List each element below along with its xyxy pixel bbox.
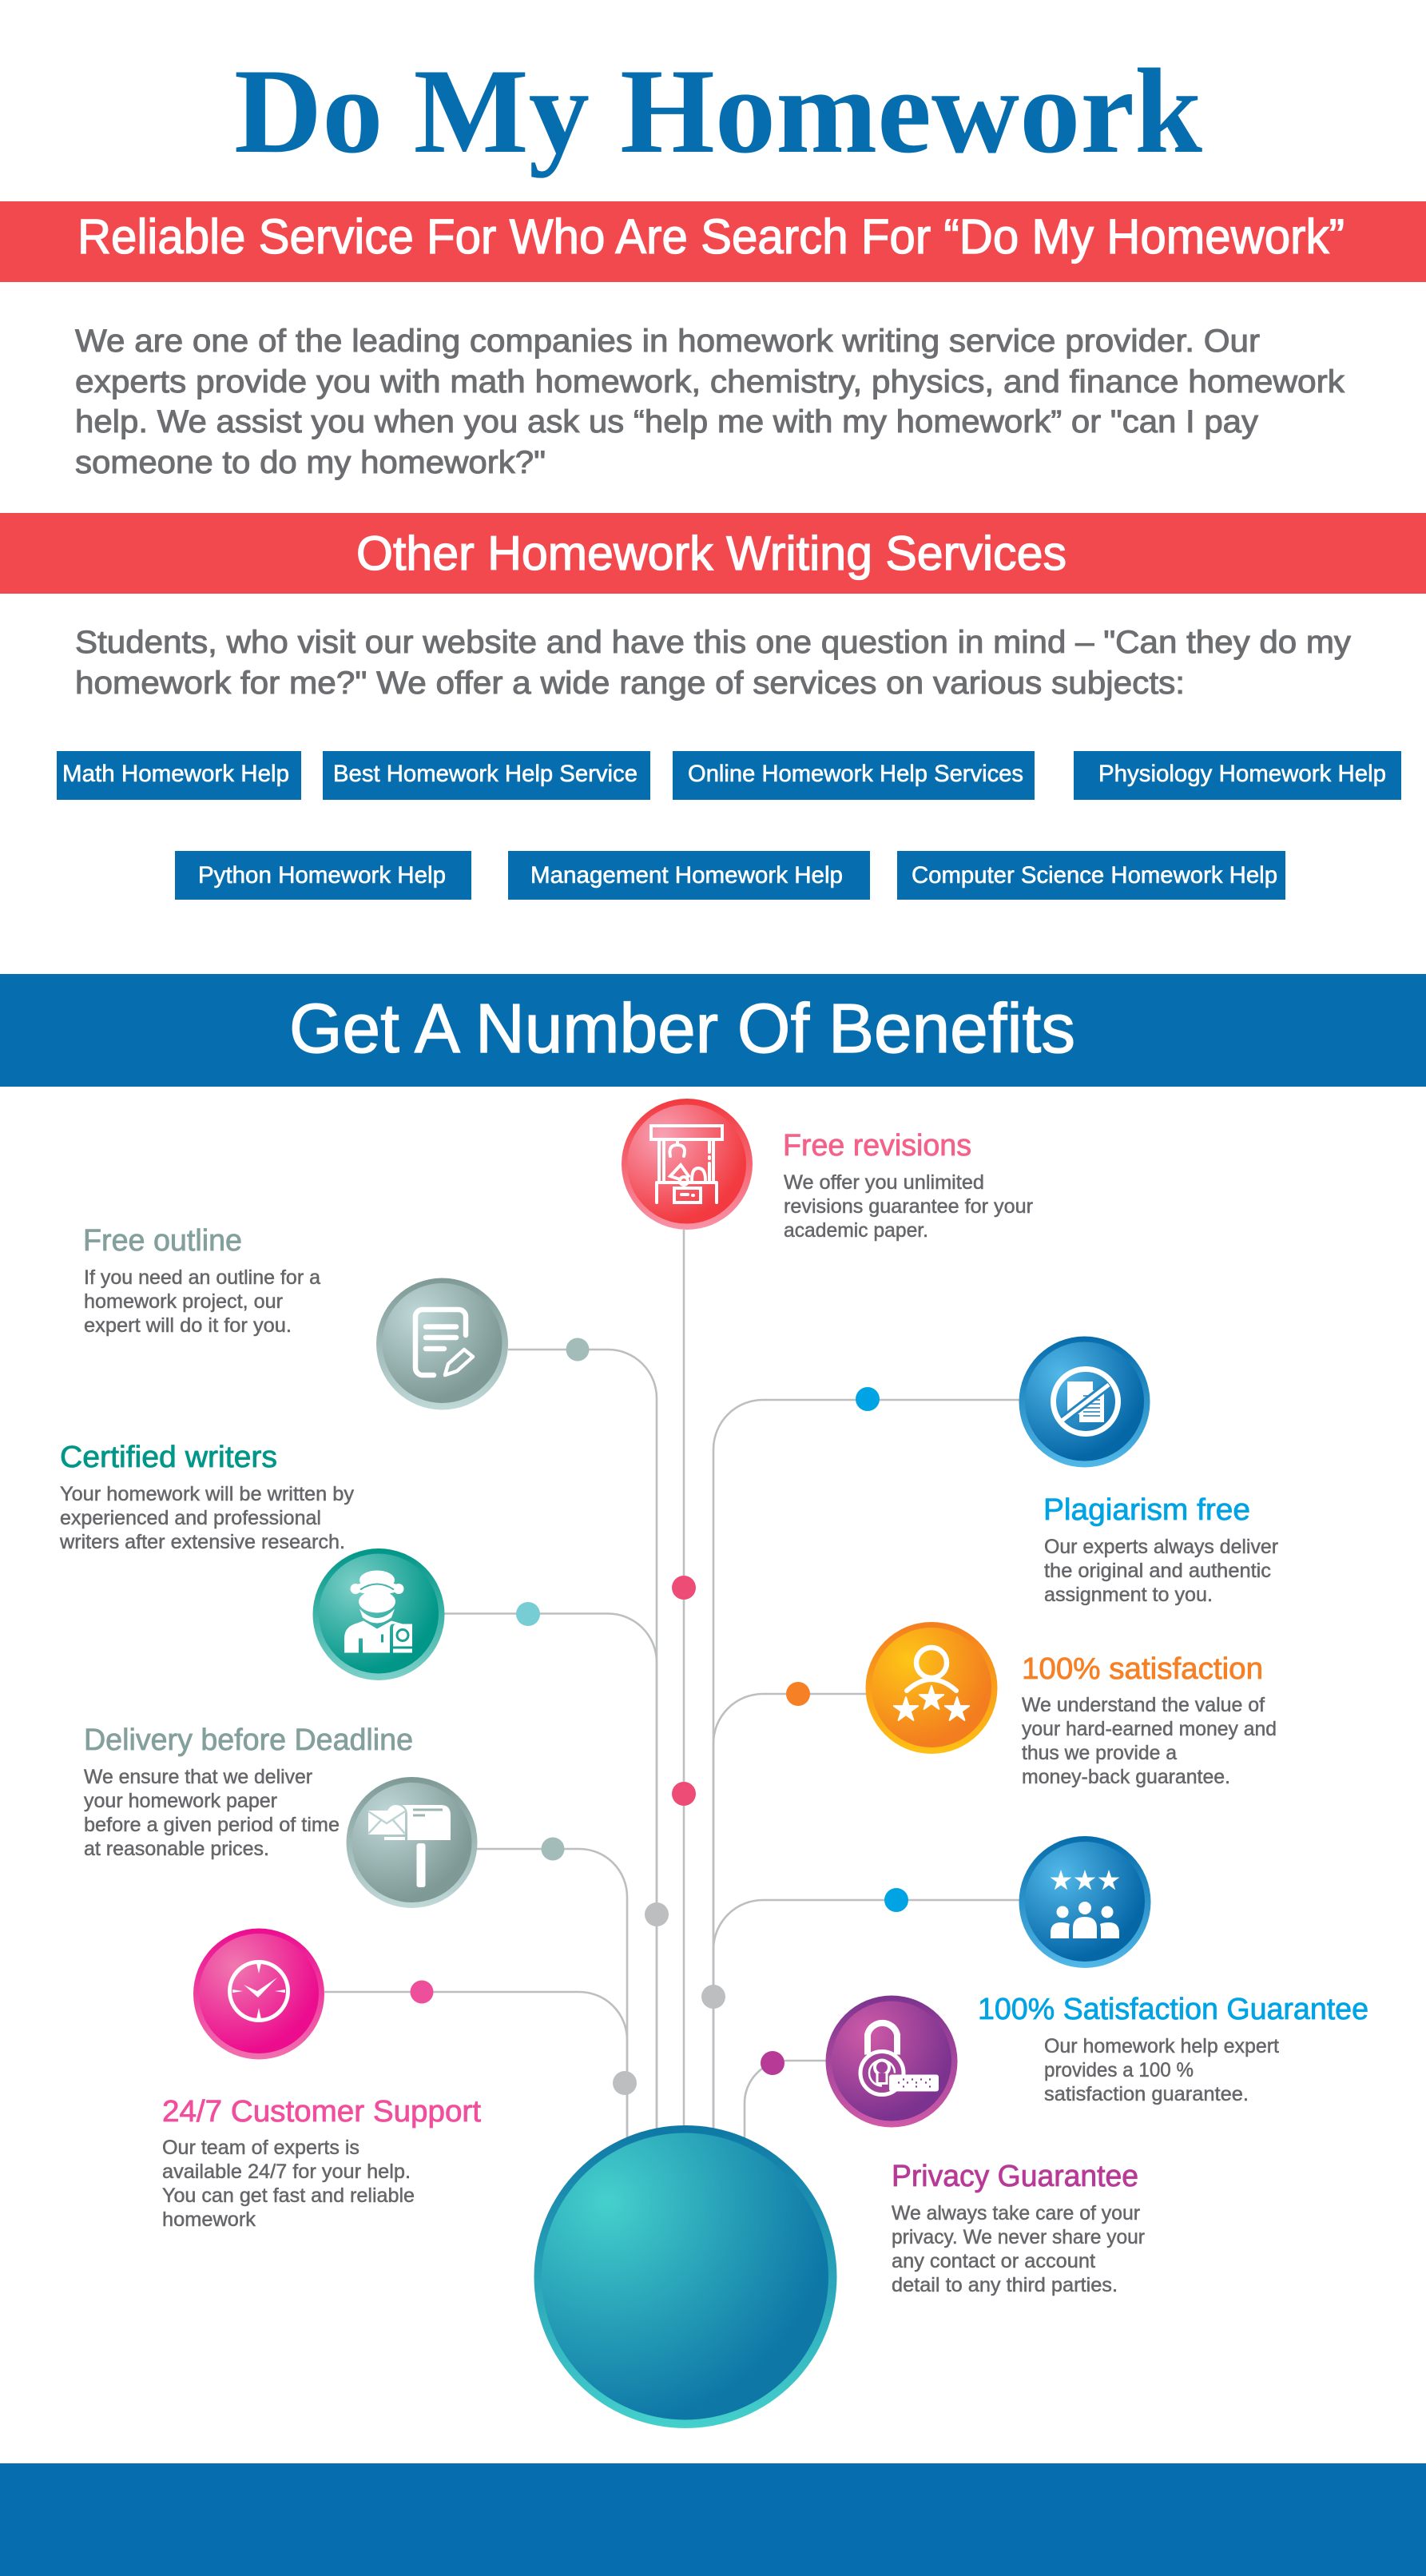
service buttons [57, 751, 1401, 900]
text: delivery before deadline: before a given period of time [84, 1814, 340, 1836]
text: 100% satisfaction: 100% satisfaction [1022, 1652, 1263, 1686]
button: math [57, 751, 301, 800]
text: delivery before deadline: We ensure that we deliver [84, 1766, 312, 1788]
banner: reliable service: Reliable Service For Who Are Search For “Do My Homework” [77, 209, 1345, 264]
bottom band [0, 2463, 1426, 2576]
text: privacy guarantee: privacy. We never share your [892, 2226, 1145, 2248]
text: 100% satisfaction [1022, 1652, 1277, 1788]
button: online: Online Homework Help Services [688, 761, 1023, 787]
text: plagiarism free: the original and authentic [1044, 1560, 1271, 1582]
text: certified writers [59, 1441, 355, 1553]
text: free revisions: academic paper. [784, 1219, 928, 1242]
intro paragraph: We are one of the leading companies in homework writing service provider. Our [75, 324, 1260, 359]
text: delivery before deadline: at reasonable prices. [84, 1838, 269, 1860]
banner: benefits: Get A Number Of Benefits [289, 990, 1075, 1067]
text: certified writers: experienced and professional [60, 1507, 321, 1529]
text: privacy guarantee: detail to any third parties. [892, 2274, 1118, 2296]
services paragraph [75, 625, 1351, 701]
button: math: Math Homework Help [62, 761, 289, 787]
intro paragraph [75, 324, 1345, 480]
text: 100% satisfaction guarantee: provides a 100 % [1044, 2059, 1194, 2081]
text: privacy guarantee [892, 2160, 1145, 2296]
intro paragraph: help. We assist you when you ask us “help me with my homework” or "can I pay [75, 404, 1258, 439]
text: certified writers: Your homework will be written by [60, 1483, 355, 1505]
text: delivery before deadline [84, 1723, 413, 1860]
button: best [323, 751, 650, 800]
button: physiology [1074, 751, 1401, 800]
text: 24/7 customer support: available 24/7 for your help. [162, 2161, 411, 2183]
text: free outline [83, 1224, 320, 1337]
text: 100% satisfaction guarantee: 100% Satisfaction Guarantee [978, 1993, 1368, 2026]
text: delivery before deadline: your homework paper [84, 1790, 277, 1812]
text: plagiarism free: Plagiarism free [1043, 1493, 1250, 1527]
banner: other services: Other Homework Writing Services [356, 527, 1067, 580]
text: free revisions [783, 1129, 1033, 1242]
text: delivery before deadline: Delivery before Deadline [84, 1723, 413, 1757]
text: 100% satisfaction: money-back guarantee. [1022, 1766, 1230, 1788]
text: 100% satisfaction guarantee: Our homework help expert [1044, 2035, 1279, 2057]
text: privacy guarantee: Privacy Guarantee [892, 2160, 1138, 2193]
button: best: Best Homework Help Service [333, 761, 638, 787]
text: free outline: Free outline [83, 1224, 242, 1258]
connector lines [324, 1230, 1019, 2141]
icon: blue rated team [1019, 1836, 1150, 1968]
text: plagiarism free: assignment to you. [1044, 1584, 1213, 1606]
text: free outline: expert will do it for you. [84, 1314, 292, 1337]
button: online [673, 751, 1035, 800]
intro paragraph: experts provide you with math homework, chemistry, physics, and finance homework [75, 364, 1345, 400]
button: python [175, 851, 471, 900]
text: 24/7 customer support: You can get fast and reliable [162, 2184, 415, 2207]
icon: delivery mailbox [347, 1777, 478, 1908]
icon: customer support clock [193, 1929, 324, 2060]
text: 100% satisfaction guarantee [978, 1993, 1368, 2105]
text: 100% satisfaction guarantee: satisfaction guarantee. [1044, 2083, 1249, 2105]
icon: plagiarism free [1019, 1336, 1150, 1467]
banner: other services [0, 513, 1426, 594]
text: free outline: homework project, our [84, 1290, 283, 1313]
text: free outline: If you need an outline for a [84, 1266, 320, 1289]
icon: free outline document and pencil [376, 1278, 508, 1409]
services paragraph: homework for me?" We offer a wide range of services on various subjects: [75, 666, 1185, 701]
text: privacy guarantee: We always take care of your [892, 2202, 1140, 2224]
banner: reliable service [0, 201, 1426, 282]
central hub circle [534, 2125, 837, 2428]
button: physiology: Physiology Homework Help [1098, 761, 1386, 787]
button: computer science [897, 851, 1285, 900]
text: certified writers: Certified writers [60, 1441, 277, 1474]
icon: privacy padlock [826, 1996, 957, 2127]
button: management [508, 851, 870, 900]
services paragraph: Students, who visit our website and have this one question in mind – "Can they do my [75, 625, 1351, 660]
icon: free revisions claw machine [622, 1099, 753, 1230]
button: management: Management Homework Help [530, 862, 843, 888]
icon: satisfaction person and stars [866, 1622, 997, 1754]
text: 100% satisfaction: We understand the value of [1022, 1694, 1265, 1716]
text: certified writers: writers after extensive research. [59, 1531, 345, 1553]
icon: certified writer figure [313, 1548, 444, 1680]
text: 24/7 customer support: 24/7 Customer Support [162, 2095, 481, 2129]
text: 24/7 customer support [162, 2095, 481, 2231]
button: computer science: Computer Science Homework Help [912, 862, 1277, 888]
title: Do My Homework [234, 44, 1202, 178]
text: plagiarism free: Our experts always deliver [1044, 1536, 1278, 1558]
text: privacy guarantee: any contact or account [892, 2250, 1095, 2272]
text: 24/7 customer support: homework [162, 2208, 256, 2231]
text: plagiarism free [1043, 1493, 1278, 1606]
text: 24/7 customer support: Our team of experts is [162, 2137, 359, 2159]
text: 100% satisfaction: thus we provide a [1022, 1742, 1177, 1764]
intro paragraph: someone to do my homework?" [75, 445, 546, 480]
banner: benefits [0, 974, 1426, 1087]
text: free revisions: Free revisions [783, 1129, 971, 1163]
button: python: Python Homework Help [198, 862, 446, 888]
text: 100% satisfaction: your hard-earned money and [1022, 1718, 1277, 1740]
text: free revisions: We offer you unlimited [784, 1171, 984, 1194]
connector dots [411, 1338, 908, 2095]
text: free revisions: revisions guarantee for your [784, 1195, 1033, 1218]
